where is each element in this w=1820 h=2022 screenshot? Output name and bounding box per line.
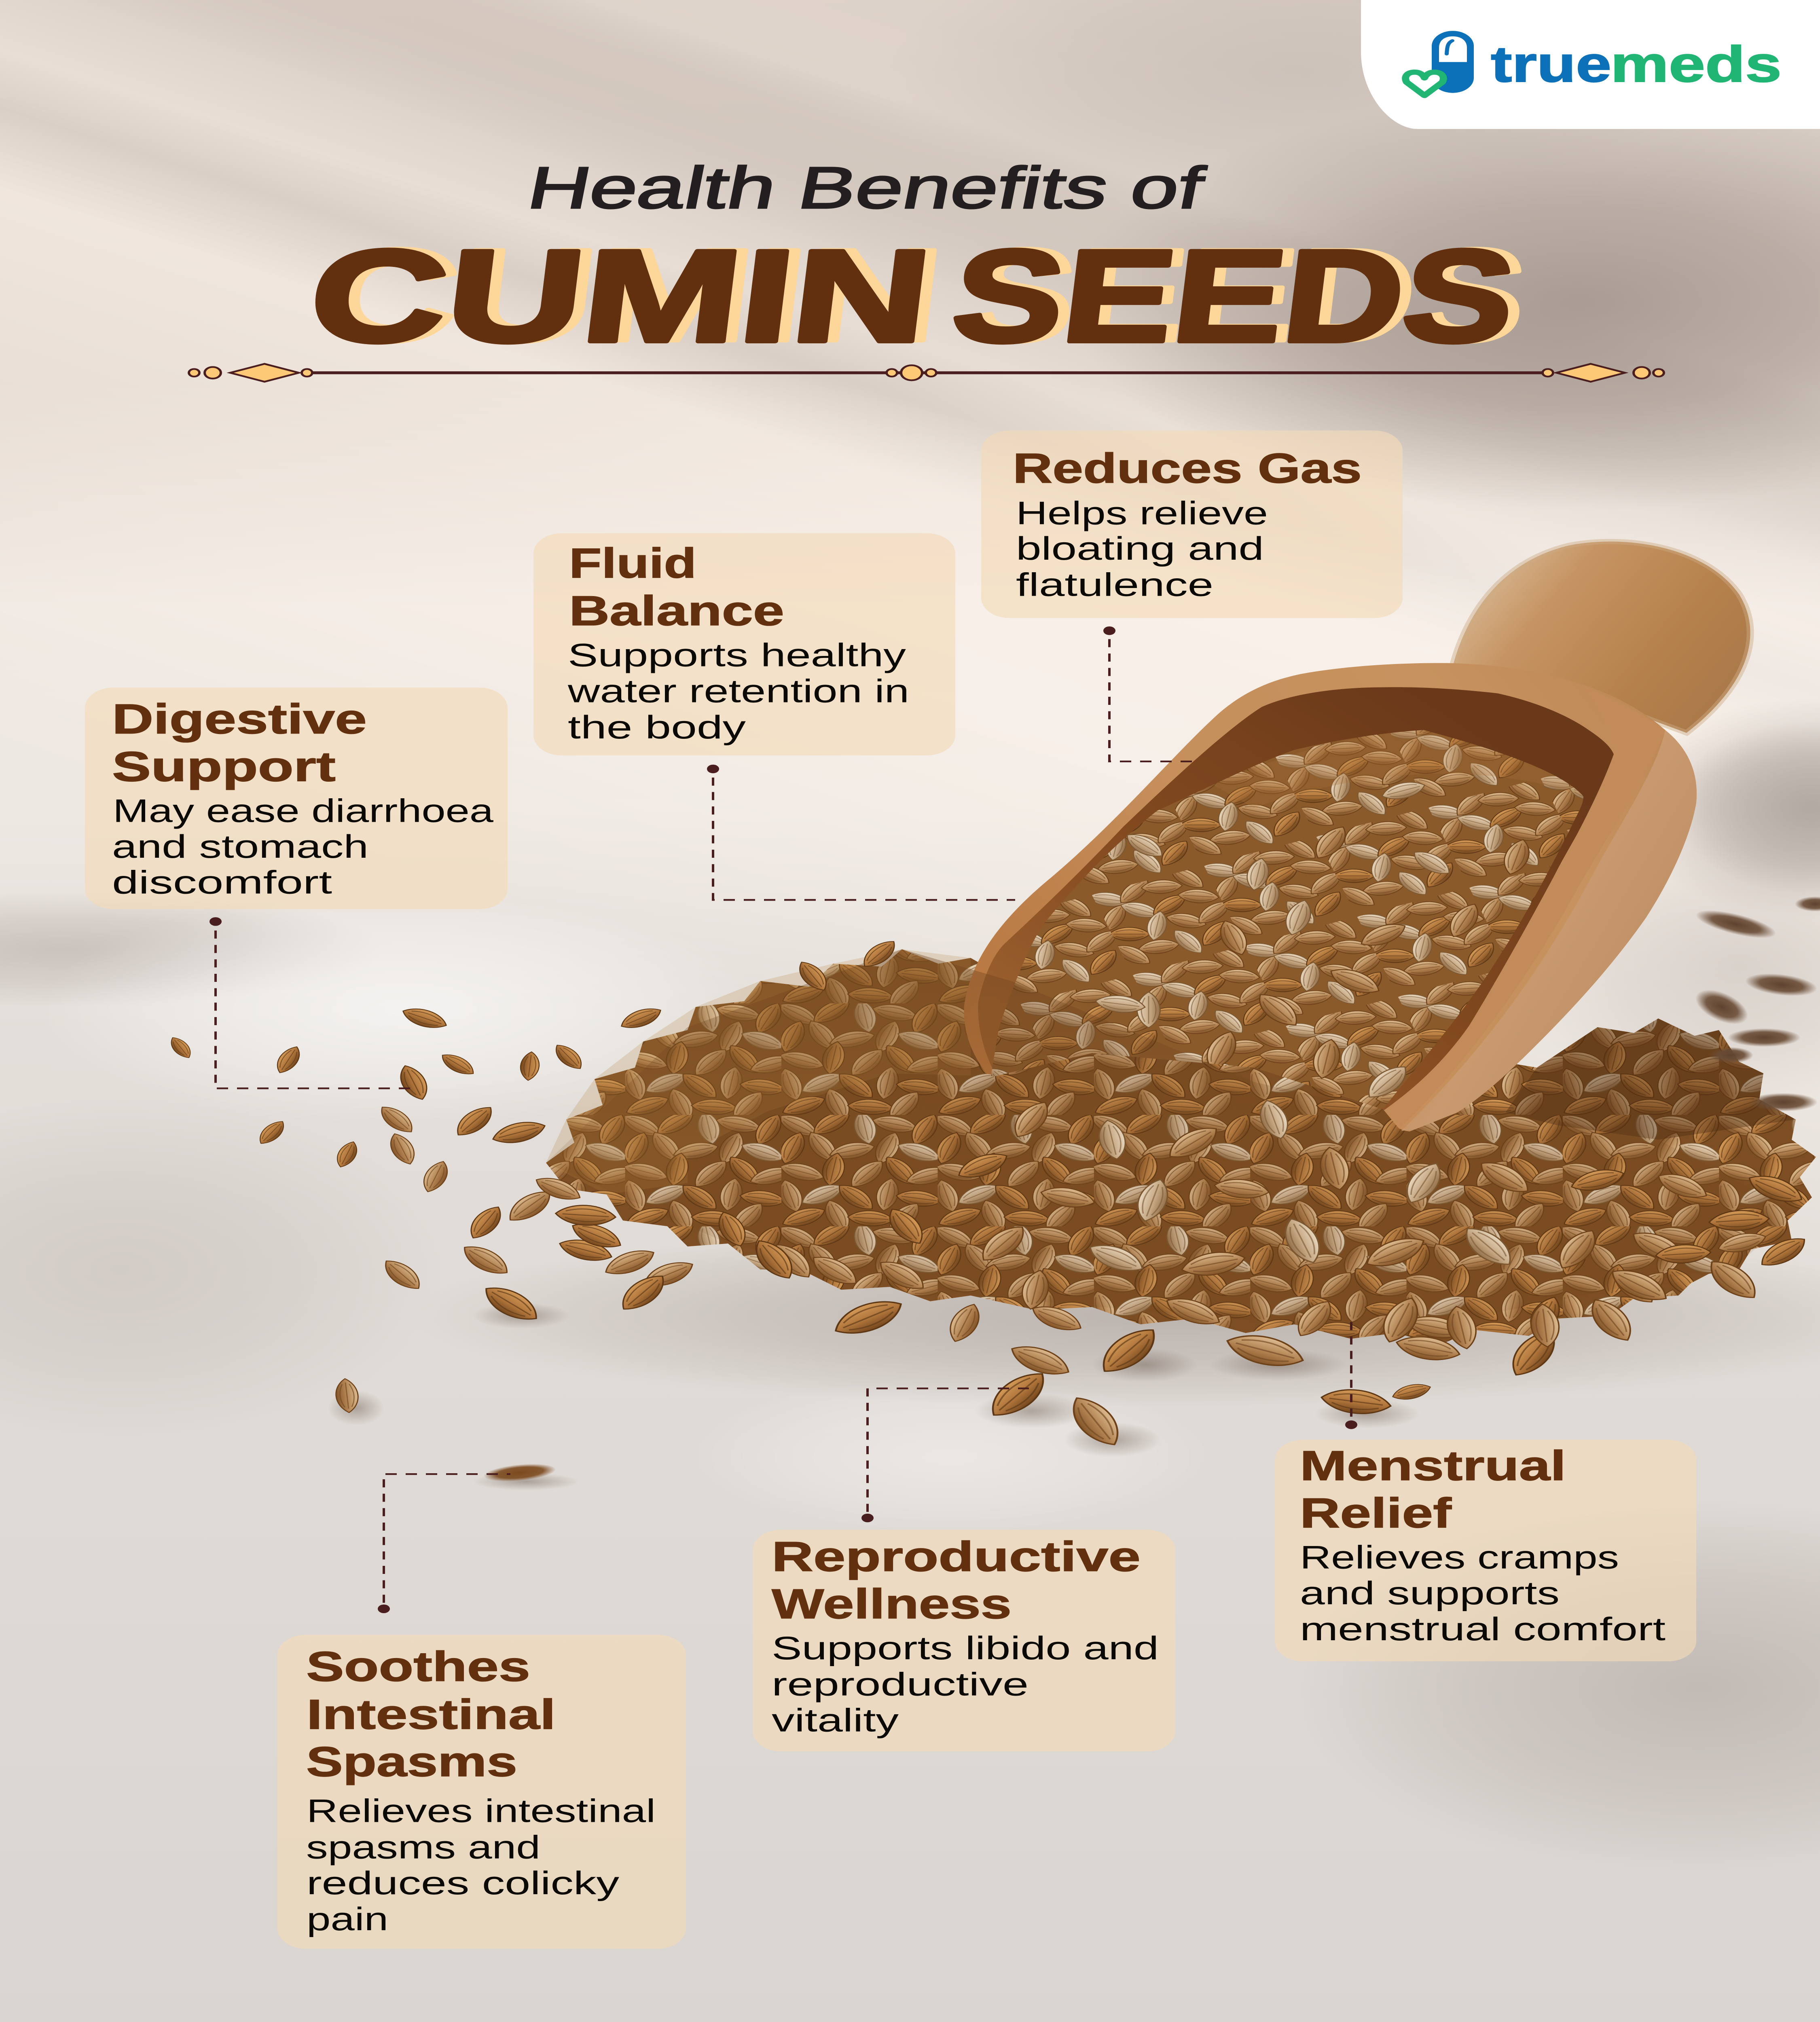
heading: fluid balance: Balance <box>569 587 784 634</box>
text: menstrual relief description <box>1300 1539 1666 1647</box>
text: menstrual relief description: Relieves cramps <box>1300 1539 1619 1576</box>
scoop interior <box>978 687 1614 1110</box>
text: reproductive wellness description: reproductive <box>772 1666 1029 1703</box>
heading: menstrual relief <box>1300 1442 1566 1536</box>
connector: reduces gas <box>1103 626 1197 761</box>
heading: reproductive wellness <box>772 1533 1141 1627</box>
main heading: CUMIN SEEDS: SEEDS <box>945 222 1523 369</box>
heading: fluid balance: Fluid <box>569 539 696 587</box>
text: menstrual relief description: and supports <box>1300 1575 1560 1611</box>
heading: reproductive wellness: Reproductive <box>772 1533 1141 1580</box>
text: digestive support description <box>112 793 493 901</box>
text: soothes intestinal spasms description: spasms and <box>306 1829 540 1865</box>
front seed pile spilling out <box>546 949 1809 1342</box>
text: soothes intestinal spasms description: pain <box>307 1901 388 1937</box>
shadow cast by scoop <box>1618 698 1820 918</box>
text: digestive support description: and stomach <box>112 828 368 865</box>
connector: reproductive wellness <box>861 1388 1029 1522</box>
panel: reproductive wellness <box>753 1530 1175 1751</box>
heading: soothes intestinal spasms: Soothes <box>306 1643 530 1690</box>
heading: reproductive wellness: Wellness <box>772 1580 1012 1627</box>
text: fluid balance description <box>567 637 909 745</box>
brand logo panel <box>1361 0 1820 129</box>
text: reproductive wellness description: vitality <box>772 1702 899 1739</box>
text: reduces gas description: bloating and <box>1016 530 1264 567</box>
heading: digestive support: Digestive <box>112 695 367 742</box>
seed contact shadows <box>328 1303 1420 1490</box>
panel: digestive support <box>85 687 508 909</box>
connector: digestive support <box>210 917 414 1088</box>
panel: reduces gas <box>981 430 1403 618</box>
shadow under seed pile <box>404 828 1820 1408</box>
heading: digestive support <box>112 695 367 790</box>
main heading: CUMIN SEEDS: SEEDS <box>957 222 1534 368</box>
text: reduces gas description <box>1016 495 1268 603</box>
text: digestive support description: discomfort <box>112 864 332 901</box>
icon: scoop handle ball <box>1452 541 1750 733</box>
main heading: CUMIN SEEDS <box>302 222 1534 369</box>
heading: digestive support: Support <box>112 743 336 790</box>
logo wordmark: meds <box>1610 36 1782 93</box>
wooden scoop <box>964 541 1750 1132</box>
heading: reduces gas: Reduces Gas <box>1013 444 1362 492</box>
scoop outer body <box>964 663 1697 1132</box>
text: reproductive wellness description: Supports libido and <box>772 1630 1159 1666</box>
text: fluid balance description: water retention in <box>567 673 909 709</box>
icon: heart <box>1405 72 1443 95</box>
heading: fluid balance <box>569 539 784 634</box>
main heading: CUMIN SEEDS: CUMIN <box>313 222 950 368</box>
text: soothes intestinal spasms description: Relieves intestinal <box>307 1792 656 1829</box>
ornamental divider <box>189 364 1664 382</box>
text: reduces gas description: Helps relieve <box>1016 495 1268 531</box>
main heading: CUMIN SEEDS: CUMIN <box>302 222 939 369</box>
panel: soothes intestinal spasms <box>277 1635 686 1949</box>
text: soothes intestinal spasms description <box>306 1792 656 1937</box>
connector: soothes intestinal spasms <box>378 1474 510 1613</box>
scoop front rim over seeds <box>1384 687 1665 1127</box>
scattered cumin seeds on the surface <box>166 937 1812 1484</box>
text: menstrual relief description: menstrual comfort <box>1300 1611 1666 1647</box>
text: fluid balance description: the body <box>568 709 746 745</box>
logo wordmark: true <box>1491 36 1611 93</box>
blurred dark seeds at right edge <box>1687 897 1820 1111</box>
heading: menstrual relief: Menstrual <box>1300 1442 1566 1489</box>
logo wordmark <box>1491 36 1782 93</box>
heading: soothes intestinal spasms: Spasms <box>306 1738 517 1785</box>
connector: fluid balance <box>707 765 1015 900</box>
text: reproductive wellness description <box>772 1630 1159 1739</box>
seed pile behind scoop <box>546 949 1816 1345</box>
text: fluid balance description: Supports healthy <box>568 637 906 673</box>
text: soothes intestinal spasms description: reduces colicky <box>307 1865 619 1901</box>
title line: Health Benefits of <box>523 155 1209 220</box>
panel: menstrual relief <box>1275 1440 1696 1661</box>
cumin seeds inside scoop <box>991 730 1583 1108</box>
text: reduces gas description: flatulence <box>1016 566 1213 603</box>
icon: capsule <box>1432 31 1474 93</box>
panel: fluid balance <box>533 533 955 755</box>
heading: soothes intestinal spasms: Intestinal <box>307 1691 556 1738</box>
text: digestive support description: May ease diarrhoea <box>113 793 493 829</box>
heading: soothes intestinal spasms <box>306 1643 556 1785</box>
connector: menstrual relief <box>1345 1322 1357 1429</box>
scoop outer side wall <box>1401 730 1697 1131</box>
heading: menstrual relief: Relief <box>1300 1489 1452 1536</box>
